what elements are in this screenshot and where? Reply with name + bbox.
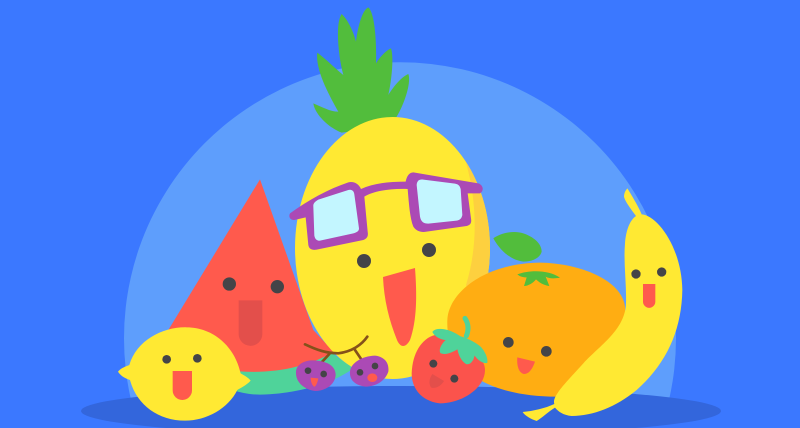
glasses frame [289,172,483,250]
strawberry mouth [429,374,444,388]
pineapple body [295,117,490,379]
cherries [296,337,388,391]
pineapple [289,7,500,379]
pineapple leaves [313,7,409,133]
orange body [447,263,625,397]
orange eyes [503,337,552,357]
cherry eyes [305,363,378,377]
watermelon flesh [168,179,333,372]
banana mouth [643,284,655,308]
orange calyx [517,271,560,286]
right cherry [350,356,388,387]
watermelon mouth [239,300,262,346]
illustration: group of smiling fruits [81,7,721,428]
ground shadow [81,386,721,428]
orange leaf [493,232,542,262]
watermelon rind [233,352,353,395]
orange mouth [517,357,535,374]
watermelon [168,179,353,395]
strawberry [412,318,486,403]
cherry mouths [311,373,377,387]
strawberry calyx [434,330,486,363]
strawberry eyes [429,360,458,383]
banana eyes [631,267,666,279]
strawberry stem [465,318,468,336]
cherry stems [305,337,367,362]
right lens [417,180,462,224]
pineapple mouth [383,268,416,346]
left lens [313,190,359,241]
banana [523,188,682,421]
banana body [523,188,682,421]
left cherry [296,360,336,391]
orange [447,232,625,397]
lemon [118,327,251,421]
watermelon eyes [223,277,284,293]
backdrop circle [124,62,676,400]
lemon mouth [173,371,192,400]
pineapple eyes [357,243,436,268]
pineapple shaded side [466,161,490,286]
lemon eyes [162,354,202,364]
pineapple glasses [289,172,483,250]
lemon body [118,327,251,421]
strawberry body [412,335,485,403]
